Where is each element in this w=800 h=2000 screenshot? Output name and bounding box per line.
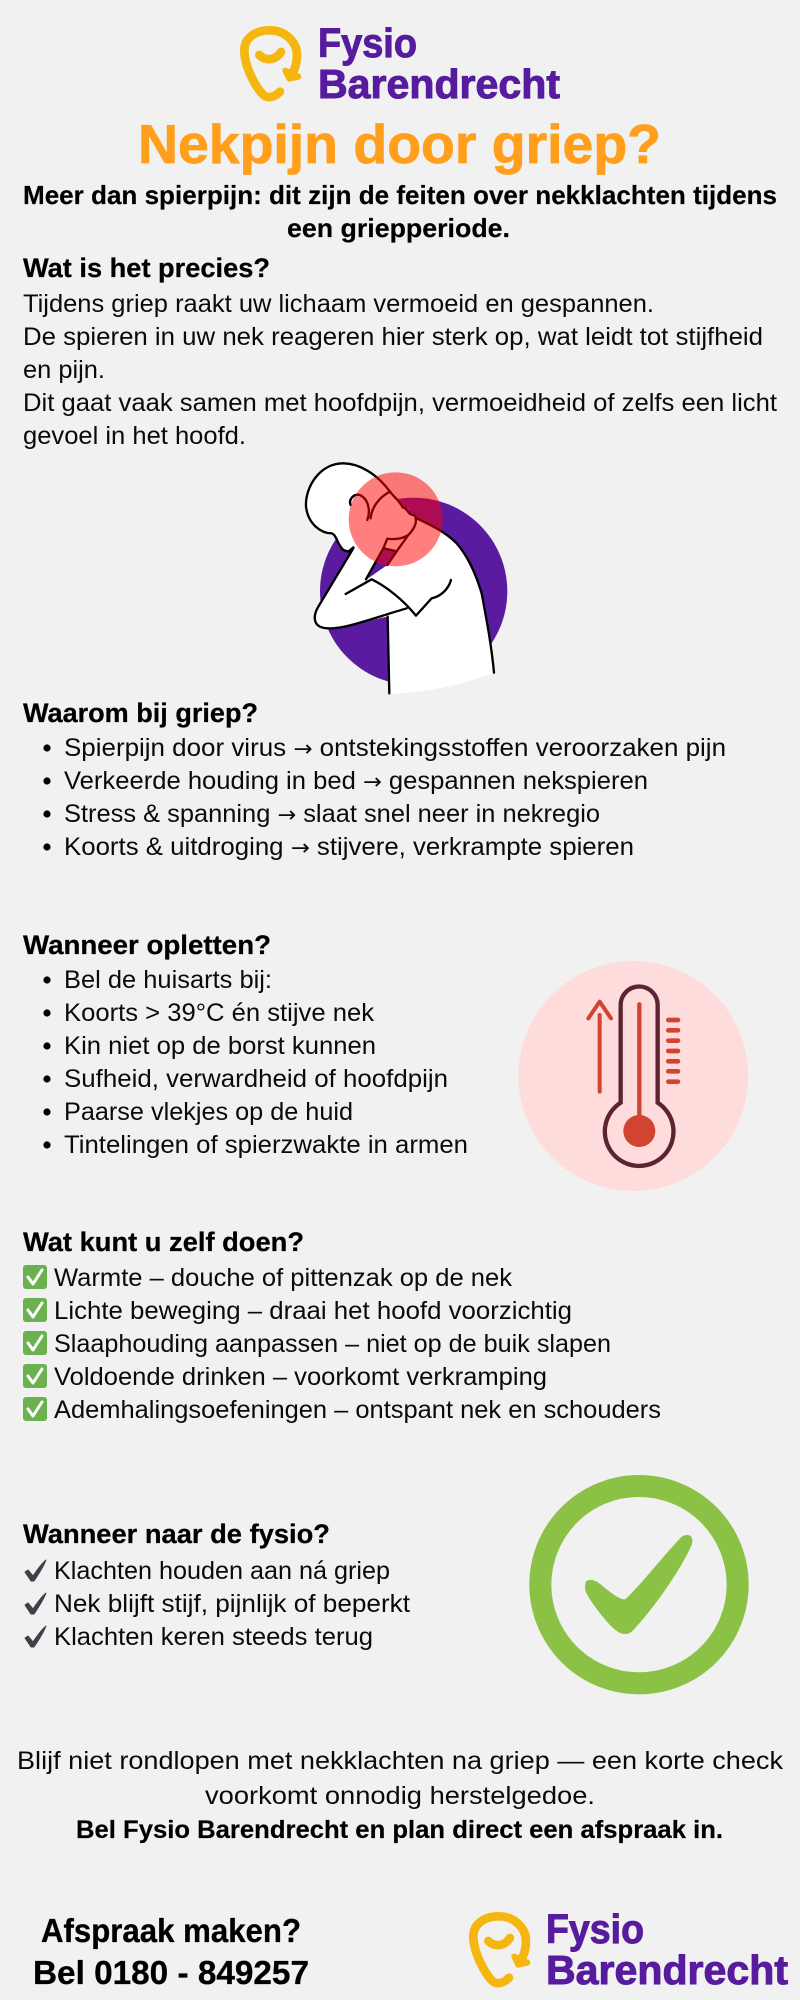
- checklist: [23, 1264, 661, 1424]
- bullet list: Sufheid, verwardheid of hoofdpijn: [64, 1065, 448, 1093]
- section: wanneer opletten: [23, 930, 468, 1159]
- bullet list: Tintelingen of spierzwakte in armen: [64, 1131, 468, 1159]
- bullet list: Paarse vlekjes op de huid: [64, 1098, 353, 1126]
- icon: green check circle: [540, 1486, 738, 1683]
- heading: Waarom bij griep?: [23, 698, 258, 728]
- checklist: [25, 1557, 410, 1651]
- call to action: Bel 0180 - 849257: [33, 1954, 309, 1991]
- text block: gevoel in het hoofd.: [23, 422, 246, 450]
- section: wat kunt u zelf doen: [23, 1227, 661, 1424]
- subtitle: [23, 180, 777, 243]
- heading: Wanneer naar de fysio?: [23, 1519, 330, 1549]
- bullet list: Bel de huisarts bij:: [64, 966, 272, 994]
- section: waarom bij griep: [23, 698, 726, 861]
- logo wordmark: [546, 1906, 788, 1993]
- closing message: Bel Fysio Barendrecht en plan direct een afspraak in.: [76, 1816, 723, 1844]
- call to action: Afspraak maken?: [41, 1912, 301, 1949]
- heading: Wat kunt u zelf doen?: [23, 1227, 304, 1257]
- checklist: Ademhalingsoefeningen – ontspant nek en schouders: [54, 1396, 661, 1424]
- bullet list: [43, 734, 726, 861]
- checklist: Voldoende drinken – voorkomt verkramping: [54, 1363, 547, 1391]
- checklist: Nek blijft stijf, pijnlijk of beperkt: [54, 1590, 410, 1618]
- bullet list: Kin niet op de borst kunnen: [64, 1032, 376, 1060]
- text block: [23, 290, 777, 450]
- text block: Tijdens griep raakt uw lichaam vermoeid en gespannen.: [23, 290, 654, 318]
- checklist: Klachten keren steeds terug: [54, 1623, 373, 1651]
- closing message: [17, 1747, 784, 1844]
- logo wordmark: [318, 20, 560, 107]
- section: wat is het precies: [23, 253, 777, 450]
- logo wordmark: Barendrecht: [318, 61, 560, 107]
- logo: header: [244, 20, 560, 107]
- icon: thermometer: [518, 961, 748, 1191]
- closing message: Blijf niet rondlopen met nekklachten na griep — een korte check: [17, 1747, 784, 1775]
- checklist: Klachten houden aan ná griep: [54, 1557, 390, 1585]
- logo wordmark: Fysio: [318, 20, 417, 66]
- section: wanneer naar de fysio: [23, 1519, 410, 1651]
- bullet list: Koorts > 39°C én stijve nek: [64, 999, 375, 1027]
- text block: Dit gaat vaak samen met hoofdpijn, vermoeidheid of zelfs een licht: [23, 389, 777, 417]
- bullet list: Koorts & uitdroging → stijvere, verkrampte spieren: [64, 833, 634, 861]
- bullet list: Verkeerde houding in bed → gespannen nekspieren: [64, 767, 648, 795]
- logo wordmark: Fysio: [546, 1906, 644, 1952]
- heading: Wat is het precies?: [23, 253, 270, 283]
- checklist: Lichte beweging – draai het hoofd voorzichtig: [54, 1297, 572, 1325]
- checklist: Warmte – douche of pittenzak op de nek: [54, 1264, 513, 1292]
- bullet list: [43, 966, 468, 1159]
- checklist: Slaaphouding aanpassen – niet op de buik slapen: [54, 1330, 611, 1358]
- text block: De spieren in uw nek reageren hier sterk op, wat leidt tot stijfheid: [23, 323, 763, 351]
- bullet list: Stress & spanning → slaat snel neer in nekregio: [64, 800, 600, 828]
- title: Nekpijn door griep?: [138, 113, 661, 175]
- text block: en pijn.: [23, 356, 105, 384]
- illustration: person holding painful neck: [306, 463, 507, 694]
- logo wordmark: Barendrecht: [546, 1947, 788, 1993]
- heading: Wanneer opletten?: [23, 930, 271, 960]
- closing message: voorkomt onnodig herstelgedoe.: [205, 1782, 595, 1810]
- subtitle: een griepperiode.: [287, 213, 510, 243]
- call to action: [33, 1912, 309, 1991]
- icon: logo mark: [473, 1916, 527, 1983]
- bullet list: Spierpijn door virus → ontstekingsstoffen veroorzaken pijn: [64, 734, 726, 762]
- logo: footer: [473, 1906, 788, 1993]
- icon: logo mark: [244, 30, 298, 97]
- subtitle: Meer dan spierpijn: dit zijn de feiten over nekklachten tijdens: [23, 180, 777, 210]
